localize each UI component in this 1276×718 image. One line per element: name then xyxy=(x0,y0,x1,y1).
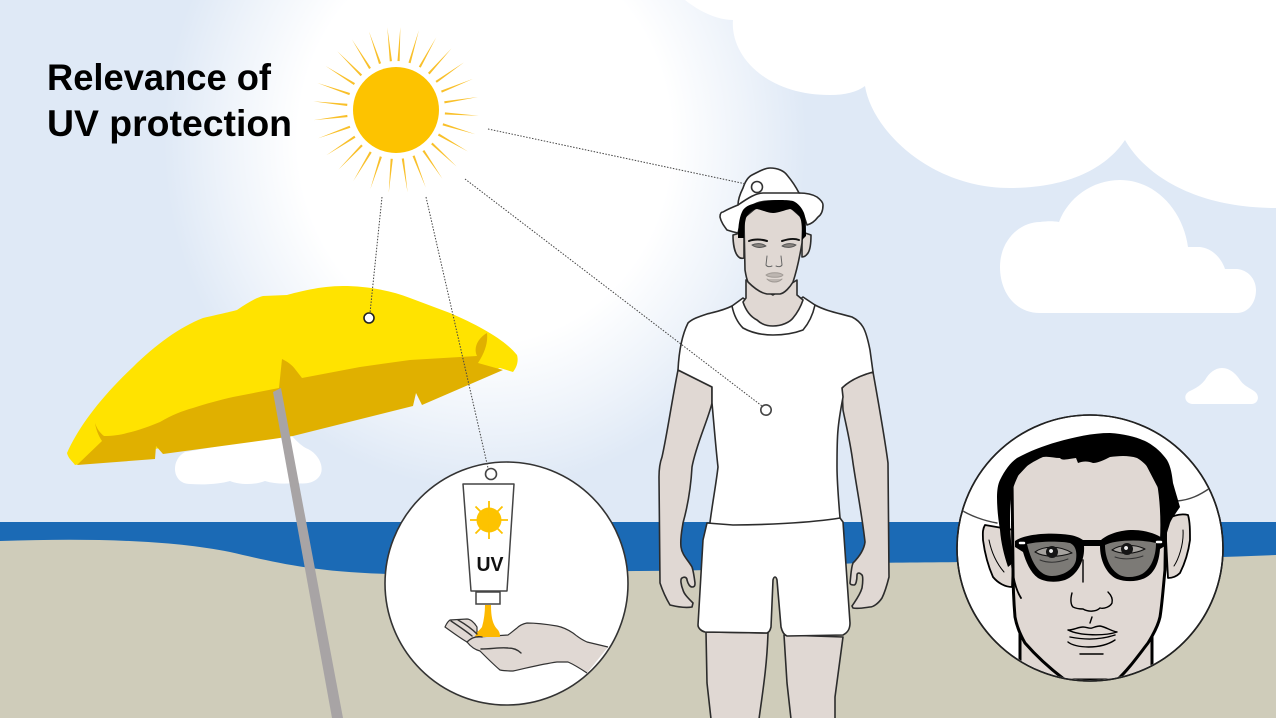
tube sun icon xyxy=(470,501,508,539)
tube cap xyxy=(476,592,500,604)
marker: sunscreen xyxy=(486,468,496,480)
title: UV protection xyxy=(47,103,292,144)
pointer sun to parasol xyxy=(370,197,382,313)
hat xyxy=(720,168,823,233)
t-shirt xyxy=(678,297,873,530)
mouth xyxy=(1068,617,1117,654)
left ear xyxy=(983,525,1014,587)
right lens xyxy=(1105,541,1156,577)
parasol xyxy=(67,286,518,718)
left leg xyxy=(706,632,768,718)
neck xyxy=(743,280,803,326)
sand xyxy=(0,540,1276,718)
pointer sun to sunscreen xyxy=(426,197,488,468)
left ear xyxy=(733,232,744,258)
sun rays xyxy=(313,27,479,193)
sunscreen drop xyxy=(475,605,500,637)
right ear xyxy=(802,232,811,257)
sunglasses detail circle xyxy=(957,415,1223,700)
title: Relevance of xyxy=(47,57,272,98)
sea xyxy=(0,522,1276,582)
zoomed face xyxy=(958,433,1210,700)
eye highlights xyxy=(1049,546,1128,553)
circle background xyxy=(957,415,1223,681)
hat band line xyxy=(738,193,800,205)
medium cloud right xyxy=(1000,180,1256,313)
marker: shirt xyxy=(761,405,771,415)
marker: parasol xyxy=(364,313,374,323)
man figure xyxy=(659,168,889,718)
face features xyxy=(749,239,799,282)
marker: hat xyxy=(752,182,762,192)
right ear xyxy=(1165,514,1190,578)
circle background xyxy=(385,462,628,705)
ear details xyxy=(989,530,1183,572)
finger lines xyxy=(451,620,521,653)
sunscreen detail circle xyxy=(385,462,628,705)
face shape xyxy=(1012,450,1166,680)
dotted pointer lines xyxy=(370,129,762,468)
face xyxy=(744,207,803,294)
pointer sun to hat xyxy=(488,129,746,184)
parasol canopy top xyxy=(67,286,518,465)
left lens xyxy=(1027,542,1076,576)
pupils xyxy=(1046,543,1133,558)
sun xyxy=(313,27,479,193)
hand xyxy=(445,619,608,673)
small cloud right xyxy=(1185,368,1258,404)
sideburn line xyxy=(1012,565,1021,598)
parasol pole xyxy=(273,388,343,718)
large cloud top right xyxy=(685,0,1276,208)
hair xyxy=(738,200,806,240)
eyelid shading xyxy=(1040,556,1143,562)
shorts xyxy=(698,518,850,636)
glasses rivets xyxy=(1020,542,1161,543)
tube label: UV xyxy=(476,554,504,576)
left arm xyxy=(659,370,712,607)
right leg xyxy=(784,635,843,718)
nose xyxy=(1071,560,1112,611)
glasses frame xyxy=(1015,530,1165,582)
hair xyxy=(997,433,1180,567)
shirt collar xyxy=(732,305,815,335)
tube xyxy=(463,484,514,591)
right arm xyxy=(842,372,889,608)
sun disc xyxy=(353,67,439,153)
pointer sun to shirt xyxy=(465,179,762,406)
parasol canopy underside xyxy=(77,333,503,465)
hat brim lines xyxy=(958,488,1210,523)
small cloud behind umbrella xyxy=(175,434,322,484)
neck xyxy=(1018,634,1154,678)
circle outline xyxy=(957,415,1223,681)
eyes behind lenses xyxy=(1035,545,1145,556)
